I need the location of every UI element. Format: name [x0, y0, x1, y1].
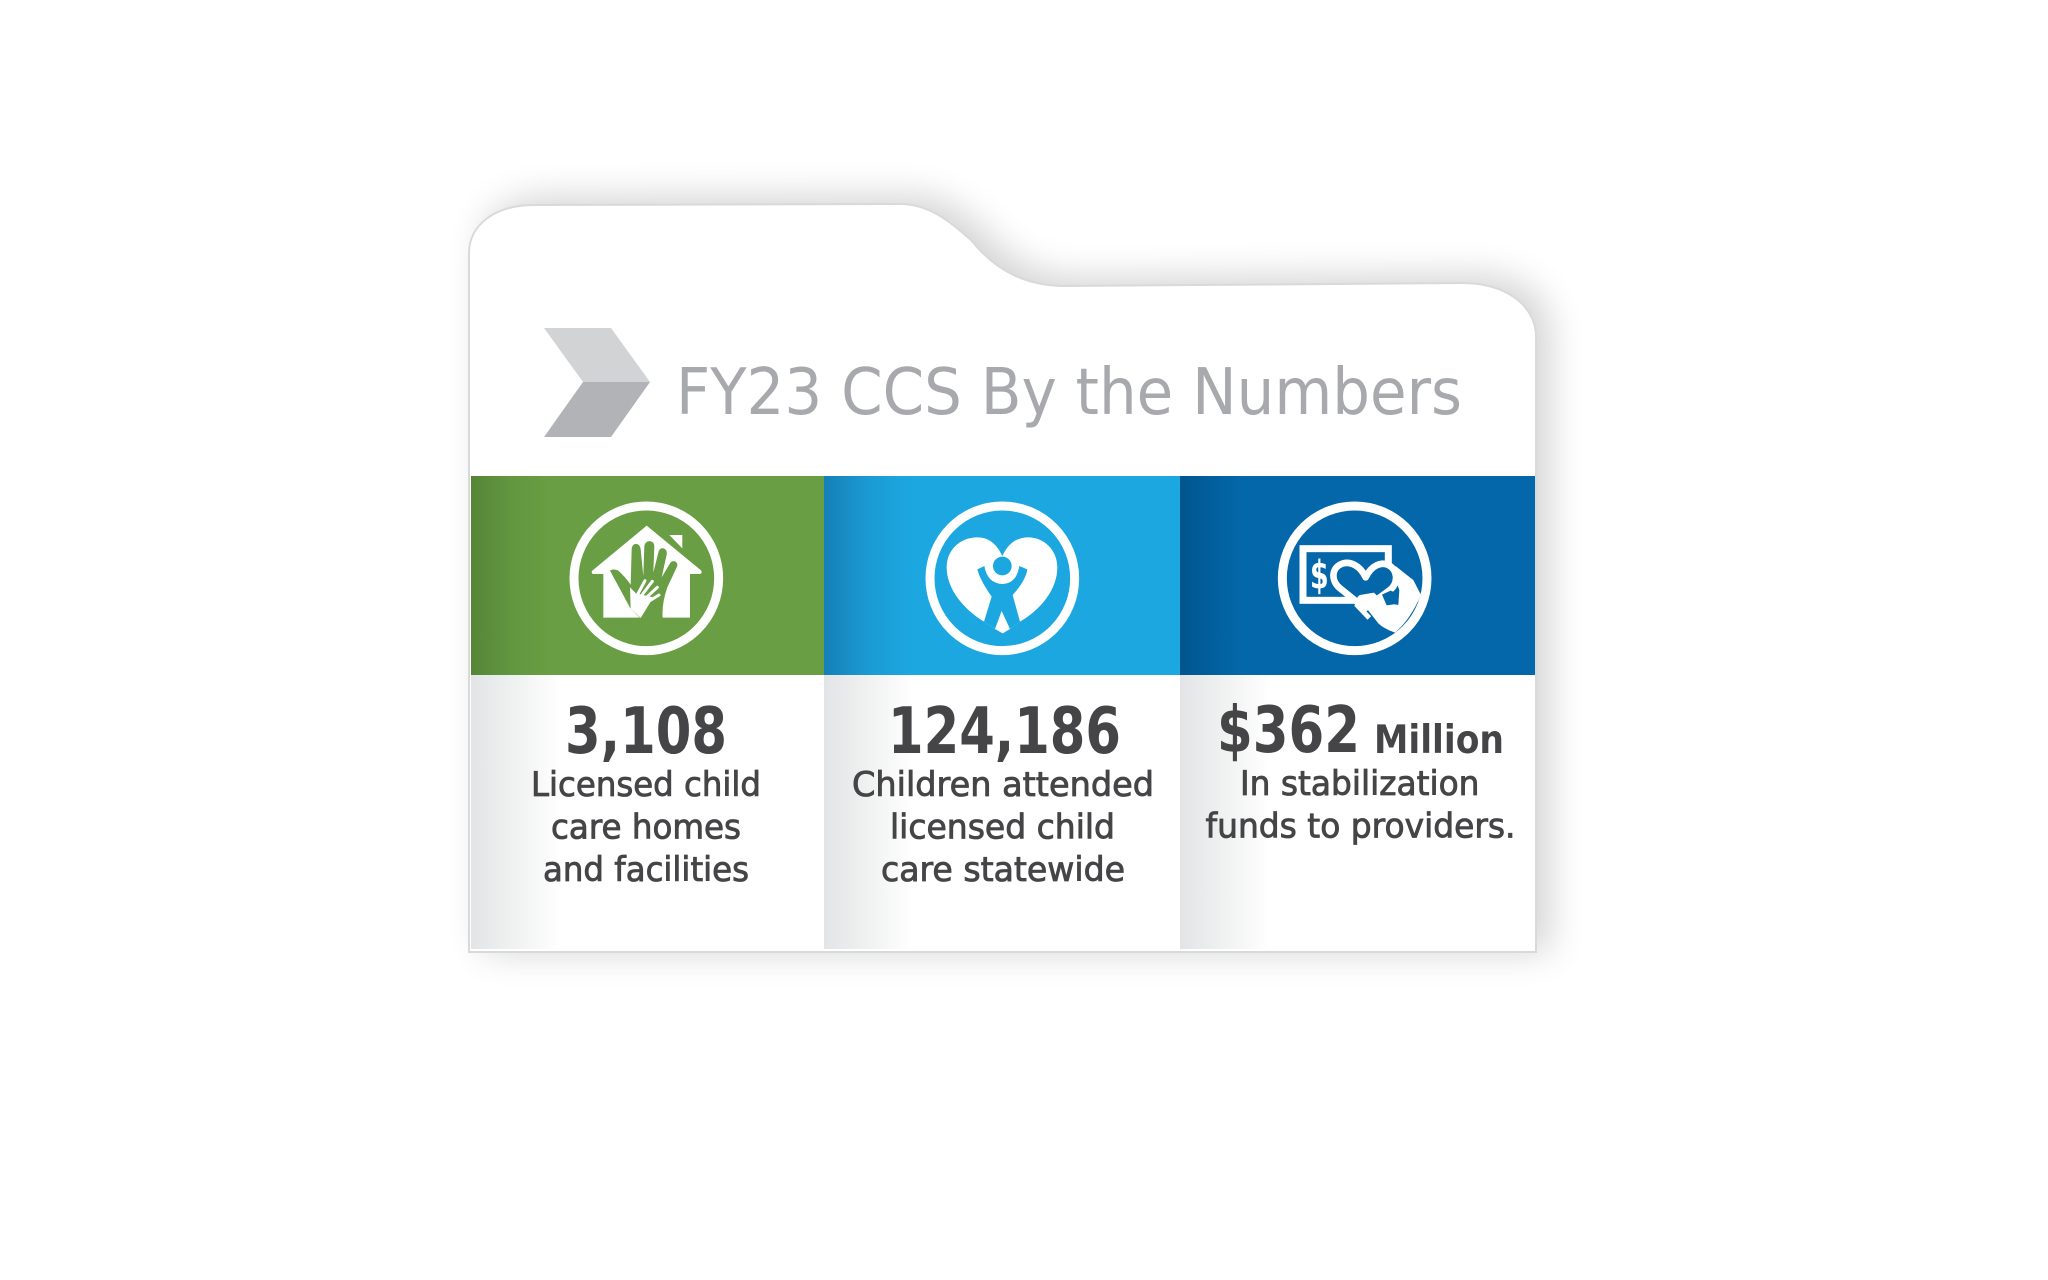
- icon: house with hands: [574, 506, 719, 651]
- icon: title chevron: [544, 328, 650, 437]
- header shading: [1180, 476, 1240, 675]
- green header band: [471, 476, 824, 675]
- description: stabilization funds: [1206, 764, 1516, 846]
- description: licensed homes: [531, 765, 761, 889]
- stat: 3,108: 3,108: [565, 695, 727, 769]
- dark blue header band: [1180, 476, 1535, 675]
- panel: children attended: [824, 476, 1180, 949]
- description: children attended: care statewide: [881, 850, 1125, 889]
- icon: hand holding heart and money: [1282, 506, 1427, 651]
- description: licensed homes: care homes: [551, 808, 741, 846]
- description: children attended: [852, 765, 1154, 889]
- description: children attended: licensed child: [890, 808, 1115, 846]
- light blue header band: [824, 476, 1180, 675]
- icon: child in heart: [930, 506, 1075, 651]
- lower panel shading: [1180, 675, 1270, 949]
- folder panel: [469, 196, 1550, 952]
- description: children attended: Children attended: [852, 765, 1154, 804]
- panel: stabilization funds: [1180, 476, 1535, 949]
- description: stabilization funds: funds to providers.: [1206, 806, 1516, 846]
- description: licensed homes: and facilities: [543, 850, 749, 889]
- lower panel shading: [471, 675, 561, 949]
- header shading: [471, 476, 551, 675]
- stat: $362 Million: $362: [1217, 694, 1360, 768]
- description: stabilization funds: In stabilization: [1240, 764, 1480, 803]
- lower panel shading: [824, 675, 914, 949]
- header shading: [824, 476, 914, 675]
- panel: licensed homes: [471, 476, 824, 949]
- description: licensed homes: Licensed child: [531, 765, 761, 804]
- stat: $362 Million: Million: [1374, 718, 1504, 763]
- icon: hand holding heart and money: $: [1310, 553, 1329, 598]
- stat: 124,186: 124,186: [888, 695, 1121, 769]
- stat: $362 Million: [1217, 694, 1504, 768]
- title: FY23 CCS By the Numbers: [676, 356, 1462, 430]
